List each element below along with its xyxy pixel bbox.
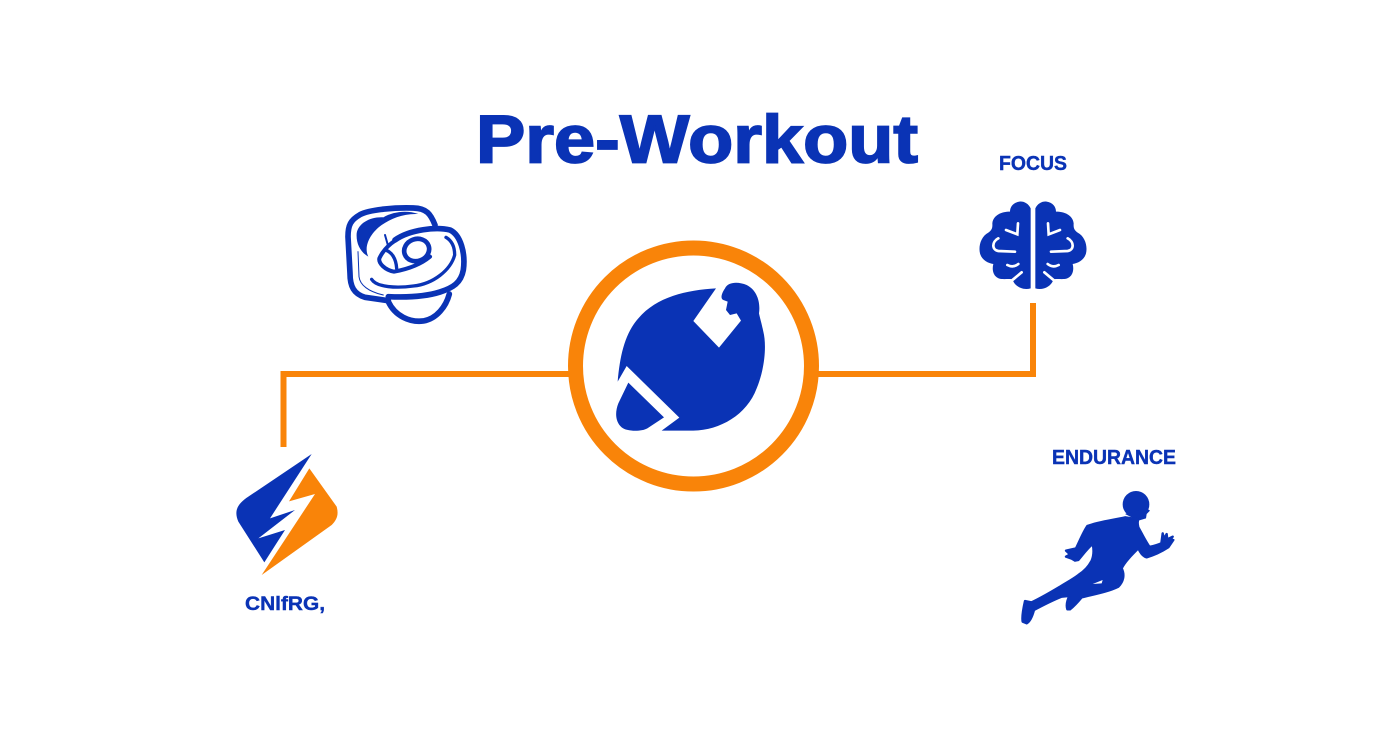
label: energy (as printed): CNlfRG, [245,594,325,615]
label: focus: FOCUS [999,153,1067,175]
connector: center to focus icon [818,303,1033,374]
label: endurance: ENDURANCE [1052,447,1176,469]
title: Pre-Workout [476,102,918,178]
icon: energy bolt badge [236,454,338,575]
connector: center to energy icon [284,374,569,447]
central badge [576,248,812,484]
right hemisphere [1035,202,1087,289]
orange ring [576,248,812,484]
icon: central blue figure [616,283,765,431]
icon: runner [1022,491,1173,623]
icon: muscle outline [348,208,464,321]
left hemisphere [979,202,1031,289]
icon: brain [979,202,1087,289]
